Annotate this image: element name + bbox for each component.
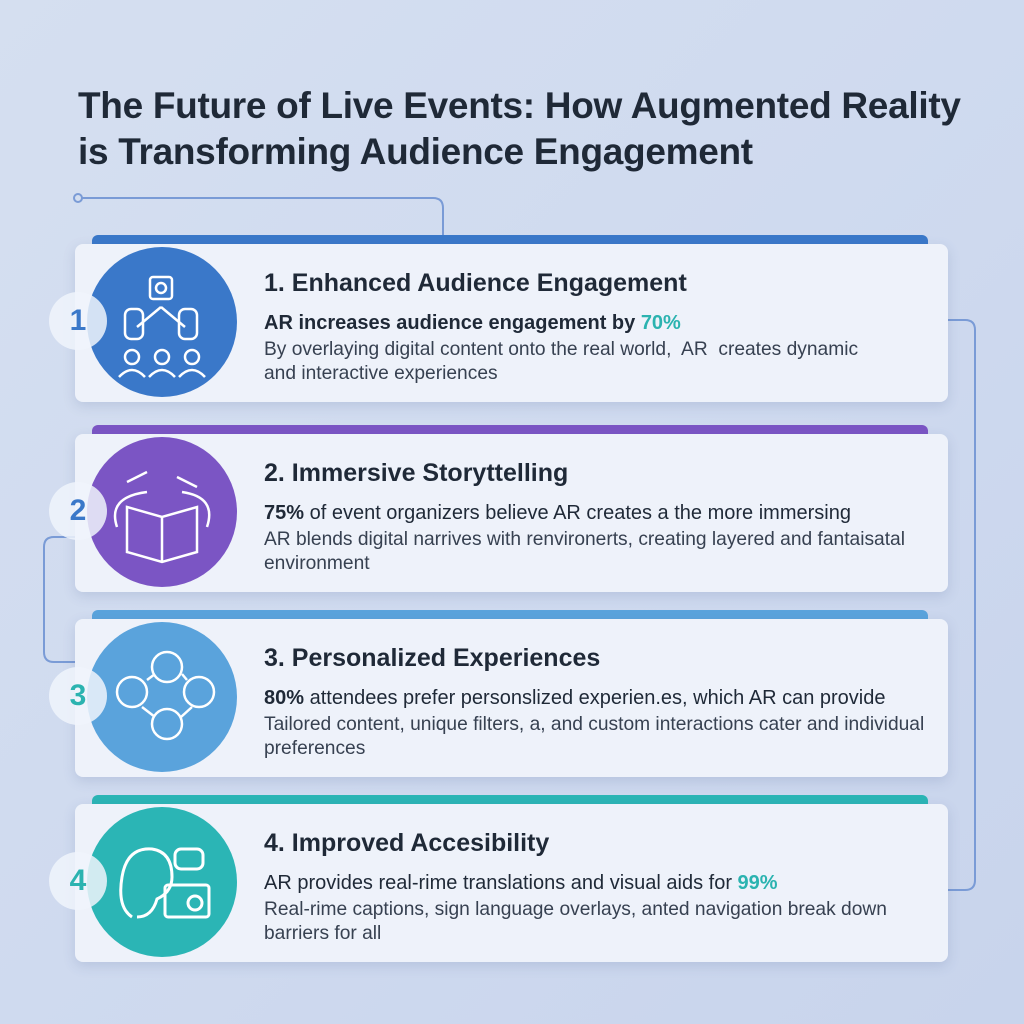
icon: book bbox=[87, 437, 237, 587]
text 3: Tailored content, unique filters, a, and custom interactions cater and individual bbox=[264, 714, 924, 735]
badge 1 bbox=[49, 292, 107, 350]
text 4: barriers for all bbox=[264, 923, 381, 944]
text 2 bbox=[264, 459, 905, 574]
card 4 top bar bbox=[92, 795, 928, 809]
text 4: Real-rime captions, sign language overlays, anted navigation break down bbox=[264, 899, 887, 920]
icon: personalization bbox=[87, 622, 237, 772]
text 2: 2. Immersive Storyttelling bbox=[264, 459, 568, 487]
badge 4: 4 bbox=[70, 864, 86, 897]
badge 3 bbox=[49, 667, 107, 725]
badge 1: 1 bbox=[70, 304, 86, 337]
text 1: AR increases audience engagement by 70% bbox=[264, 312, 681, 334]
title bbox=[78, 85, 961, 172]
title: The Future of Live Events: How Augmented Reality bbox=[78, 85, 961, 126]
text 4: 4. Improved Accesibility bbox=[264, 829, 549, 857]
panel: card 2 bbox=[75, 434, 948, 592]
icon: audience bbox=[87, 247, 237, 397]
card 1 top bar bbox=[92, 235, 928, 249]
text 1: and interactive experiences bbox=[264, 363, 498, 384]
text 3: 3. Personalized Experiences bbox=[264, 644, 600, 672]
text 3: preferences bbox=[264, 738, 365, 759]
text 4: AR provides real-rime translations and visual aids for 99% bbox=[264, 872, 778, 894]
text 1: By overlaying digital content onto the real world, AR creates dynamic bbox=[264, 339, 858, 360]
title: is Transforming Audience Engagement bbox=[78, 131, 753, 172]
panel: card 4 bbox=[75, 804, 948, 962]
text 1: 1. Enhanced Audience Engagement bbox=[264, 269, 687, 297]
badge 4 bbox=[49, 852, 107, 910]
card 2 top bar bbox=[92, 425, 928, 439]
text 4 bbox=[264, 829, 887, 944]
icon: accessibility bbox=[87, 807, 237, 957]
text 2: 75% of event organizers believe AR creates a the more immersing bbox=[264, 502, 851, 524]
panel: card 1 bbox=[75, 244, 948, 402]
text 3: 80% attendees prefer personslized experien.es, which AR can provide bbox=[264, 687, 885, 709]
text 2: AR blends digital narrives with renvironerts, creating layered and fantaisatal bbox=[264, 529, 905, 550]
panel: card 3 bbox=[75, 619, 948, 777]
text 1 bbox=[264, 269, 858, 384]
card 3 top bar bbox=[92, 610, 928, 624]
text 3 bbox=[264, 644, 924, 759]
text 2: environment bbox=[264, 553, 370, 574]
badge 3: 3 bbox=[70, 679, 86, 712]
badge 2: 2 bbox=[70, 494, 86, 527]
badge 2 bbox=[49, 482, 107, 540]
